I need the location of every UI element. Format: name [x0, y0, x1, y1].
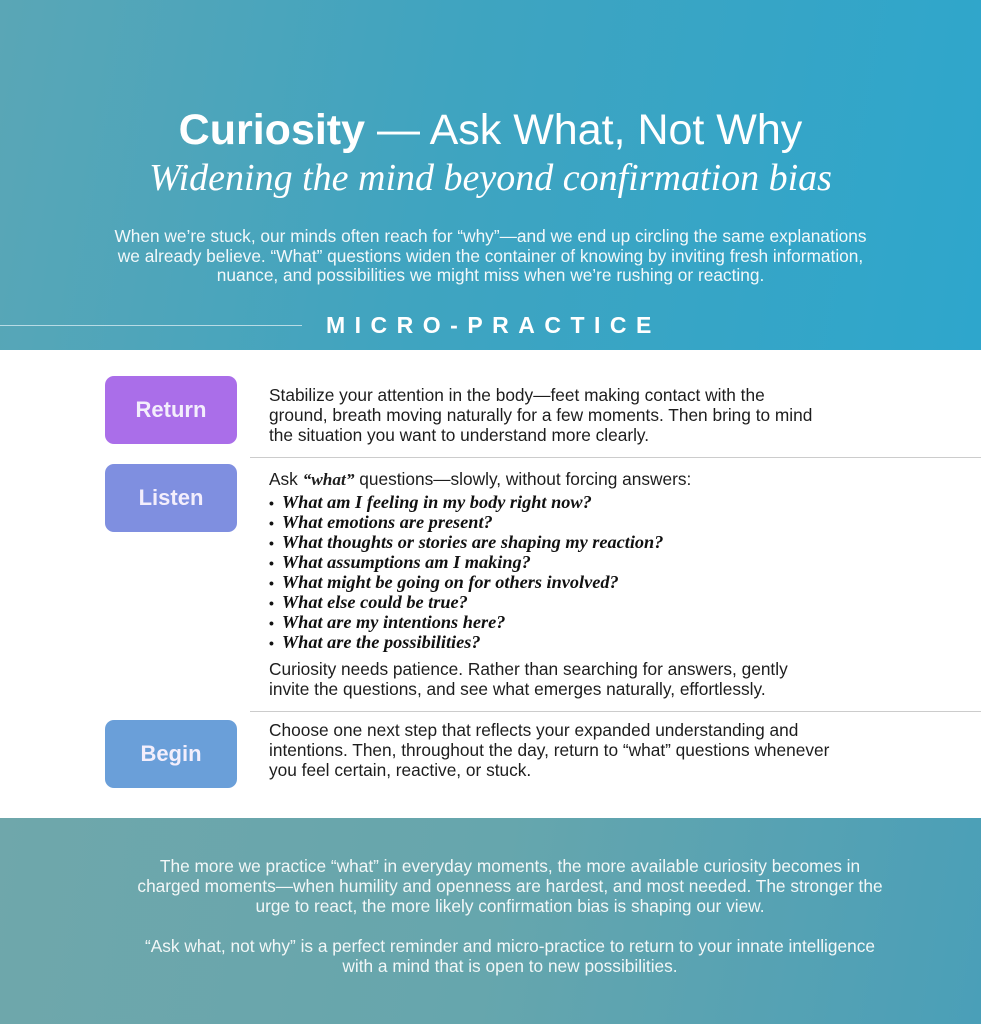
text: return: ground, breath moving naturally for a few moments. Then bring to mind [269, 405, 812, 425]
header band [0, 0, 981, 350]
text: listen: What emotions are present? [282, 512, 493, 532]
text: listen: Ask “what” questions—slowly, without forcing answers: [269, 469, 691, 489]
subtitle: Widening the mind beyond confirmation bias [149, 157, 832, 199]
text: listen: What are the possibilities? [282, 632, 480, 652]
text: listen: What are my intentions here? [282, 612, 505, 632]
intro paragraph: When we’re stuck, our minds often reach for “why”—and we end up circling the same explanations [114, 226, 867, 246]
text: listen: invite the questions, and see what emerges naturally, effortlessly. [269, 679, 766, 699]
text: return [269, 385, 812, 445]
footer band [0, 818, 981, 1024]
button: listen: Listen [139, 485, 203, 510]
text: begin: you feel certain, reactive, or stuck. [269, 760, 531, 780]
text: begin: Choose one next step that reflects your expanded understanding and [269, 720, 798, 740]
closing paragraph: charged moments—when humility and openness are hardest, and most needed. The stronger the [137, 876, 883, 896]
button: return [105, 376, 237, 444]
step: listen [105, 464, 788, 699]
button: return: Return [136, 397, 206, 422]
intro paragraph: we already believe. “What” questions widen the container of knowing by inviting fresh information, [118, 246, 863, 266]
text: listen [269, 469, 788, 699]
closing reminder: “Ask what, not why” is a perfect reminder and micro-practice to return to your innate intelligence [145, 936, 875, 956]
button: listen [105, 464, 237, 532]
text: listen: What else could be true? [282, 592, 468, 612]
closing paragraph: urge to react, the more likely confirmation bias is shaping our view. [255, 896, 765, 916]
intro paragraph: nuance, and possibilities we might miss when we’re rushing or reacting. [217, 265, 764, 285]
intro paragraph [114, 226, 867, 285]
button: begin: Begin [140, 741, 202, 766]
button: begin [105, 720, 237, 788]
text: begin [269, 720, 830, 780]
closing paragraph [137, 856, 883, 916]
closing reminder [145, 936, 875, 976]
closing reminder: with a mind that is open to new possibilities. [342, 956, 678, 976]
section heading: micro-practice: MICRO-PRACTICE [326, 312, 661, 338]
title: Curiosity — Ask What, Not Why [179, 106, 802, 154]
text: return: Stabilize your attention in the body—feet making contact with the [269, 385, 765, 405]
text: begin: intentions. Then, throughout the day, return to “what” questions whenever [269, 740, 829, 760]
text: listen: What assumptions am I making? [282, 552, 531, 572]
text: return: the situation you want to understand more clearly. [269, 425, 649, 445]
step: begin [105, 720, 830, 788]
step: return [105, 376, 812, 445]
text: listen: What might be going on for others involved? [282, 572, 619, 592]
closing paragraph: The more we practice “what” in everyday moments, the more available curiosity becomes in [160, 856, 860, 876]
text: listen: What thoughts or stories are shaping my reaction? [282, 532, 663, 552]
text: listen: What am I feeling in my body right now? [282, 492, 592, 512]
text: listen: Curiosity needs patience. Rather than searching for answers, gently [269, 659, 788, 679]
